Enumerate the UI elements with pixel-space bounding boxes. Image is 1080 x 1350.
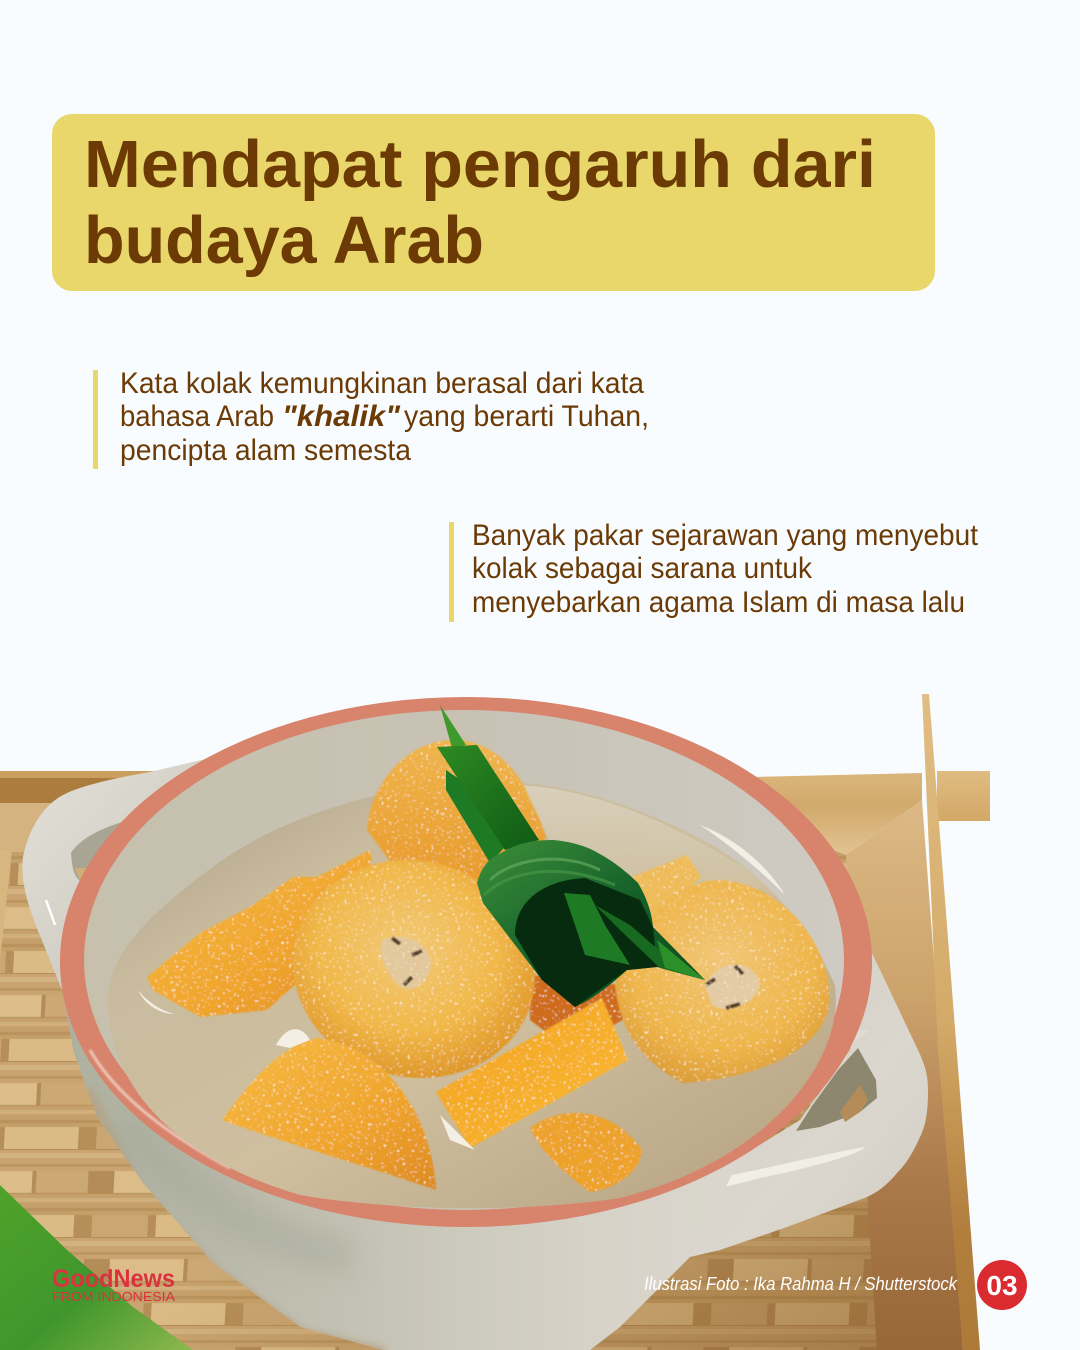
center yam [436,998,628,1148]
title banner: Mendapat pengaruh dari [84,127,876,202]
logo: GoodNews [52,1265,175,1293]
bowl rim [60,697,872,1227]
back right yam [624,855,701,915]
photo: kolak fruit [147,740,830,1192]
text block: historians: kolak sebagai sarana untuk [472,552,813,585]
text block: historians [449,519,979,622]
photo: pandan leaf [437,705,705,1007]
logo [52,1265,176,1304]
photo credit: Ilustrasi Foto : Ika Rahma H / Shutterstock [644,1274,958,1294]
orange underlayer [530,975,640,1050]
right banana slice [615,880,830,1083]
photo: bamboo tray [0,694,990,1350]
text block: khalik: "khalik" [282,400,401,433]
coconut milk [108,782,836,1208]
page number badge: 03 [986,1270,1018,1301]
bowl exterior [62,985,870,1350]
text block: historians: menyebarkan agama Islam di masa lalu [472,586,965,619]
center banana slice [268,833,560,1105]
photo: leaf corner [0,1185,193,1350]
left yam [147,850,372,1017]
photo: milk highlights [138,825,785,1150]
text block: khalik: yang berarti Tuhan, [404,400,649,433]
page number badge [977,1260,1027,1310]
text block: historians: Banyak pakar sejarawan yang menyebut [472,519,979,552]
icon: right handle [670,953,928,1257]
photo: bowl [22,697,928,1350]
back banana [367,740,546,885]
text block: khalik: bahasa Arab [120,400,274,433]
icon: left handle [22,752,235,990]
bowl interior [84,710,844,1210]
text block: khalik: Kata kolak kemungkinan berasal dari kata [120,367,644,400]
bottom left yam [222,1038,436,1190]
logo: FROM INDONESIA [52,1290,176,1304]
title banner: budaya Arab [84,203,484,278]
text block: khalik: pencipta alam semesta [120,434,411,467]
title banner [52,114,935,291]
text block: khalik [93,367,649,469]
small yam [530,1113,642,1192]
